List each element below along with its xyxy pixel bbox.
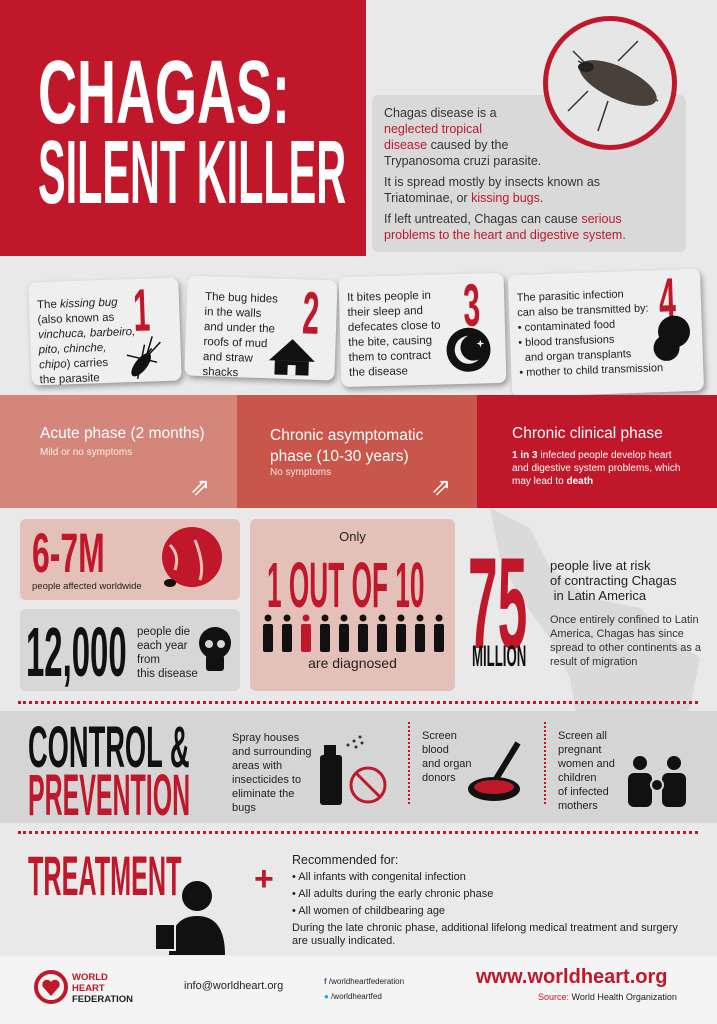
card 1: (also known as xyxy=(37,312,114,326)
card 2: in the walls xyxy=(204,306,262,320)
card 3: the bite, causing xyxy=(348,335,432,349)
logo: HEART xyxy=(72,983,105,994)
item: screen blood: Screen xyxy=(422,730,457,742)
intro text box: Chagas disease is a xyxy=(384,106,497,120)
source: Source: World Health Organization xyxy=(538,992,677,1002)
phase: chronic clinical: 1 in 3 infected people develop heart xyxy=(512,450,672,461)
item: spray: and surrounding xyxy=(232,746,312,758)
heading: control & prevention xyxy=(28,715,190,828)
logo: WORLD xyxy=(72,972,108,983)
phase: chronic clinical: may lead to death xyxy=(512,476,593,487)
icon: people row xyxy=(263,614,444,652)
icon: bug xyxy=(126,336,161,379)
card 1 xyxy=(28,277,182,386)
stat: 75 million: MILLION xyxy=(472,640,526,673)
intro text box: If left untreated, Chagas can cause serious xyxy=(384,212,622,226)
icon: doctor xyxy=(156,881,225,955)
card 4: and organ transplants xyxy=(525,348,631,364)
stat: 1 out of 10: Only xyxy=(339,529,366,544)
social: ● /worldheartfed xyxy=(324,992,382,1001)
text: risk: in Latin America xyxy=(554,588,646,603)
intro text box: Trypanosoma cruzi parasite. xyxy=(384,154,541,168)
item: screen pregnant: of infected xyxy=(558,786,609,798)
card 1: 1 xyxy=(132,276,151,344)
card 1: vinchuca, barbeiro, xyxy=(38,326,135,341)
stat: 12,000: people die xyxy=(137,626,190,638)
card 2: 2 xyxy=(301,279,320,347)
phase: chronic clinical xyxy=(477,395,717,508)
card 2: shacks xyxy=(202,366,238,379)
phase: acute: Mild or no symptoms xyxy=(40,447,132,458)
stat: 6-7M: 6-7M xyxy=(32,521,105,584)
intro text box: problems to the heart and digestive system. xyxy=(384,228,626,242)
item: spray: bugs xyxy=(232,802,256,814)
card 4: • mother to child transmission xyxy=(519,362,663,379)
stat: 12,000: 12,000 xyxy=(26,613,127,691)
stat: 75 million: 75 xyxy=(468,530,527,676)
card 4: • contaminated food xyxy=(518,319,615,334)
stat: 1 out of 10 xyxy=(250,519,455,691)
treatment text: During the late chronic phase, additional lifelong medical treatment and surgery are usually indicated. xyxy=(292,922,678,947)
card 3 xyxy=(339,273,506,387)
treatment text xyxy=(292,853,678,947)
treatment text: • All adults during the early chronic phase xyxy=(292,888,493,900)
treatment text: Recommended for: xyxy=(292,853,398,867)
card 1: pito, chinche, xyxy=(38,342,107,356)
item: screen pregnant: children xyxy=(558,772,597,784)
item: screen blood: blood xyxy=(422,744,449,756)
stat: 1 out of 10: are diagnosed xyxy=(308,655,397,671)
card 1: the parasite xyxy=(39,372,100,386)
item: spray: eliminate the xyxy=(232,788,294,800)
icon: parasite xyxy=(654,316,690,361)
text: risk: people live at risk xyxy=(550,558,650,573)
intro text box: neglected tropical xyxy=(384,122,482,136)
icon: globe xyxy=(162,527,222,587)
social xyxy=(324,977,404,1001)
item: screen pregnant: pregnant xyxy=(558,744,601,756)
card 2: roofs of mud xyxy=(203,336,268,350)
icon: spray can xyxy=(320,736,386,805)
arrow: ⇗ xyxy=(190,474,210,501)
item: spray: insecticides to xyxy=(232,774,301,786)
card 1: chipo) carries xyxy=(39,357,108,371)
card 3: 3 xyxy=(462,271,481,339)
card 3: It bites people in xyxy=(347,290,431,304)
stat: 12,000: this disease xyxy=(137,668,198,680)
heading: control & prevention: PREVENTION xyxy=(28,763,190,828)
icon: moon cloud xyxy=(446,328,490,372)
stat: 6-7M xyxy=(20,519,240,600)
card 4: can also be transmitted by: xyxy=(517,303,649,319)
card 2: and straw xyxy=(203,351,253,365)
intro text box: disease caused by the xyxy=(384,138,508,152)
title: SILENT KILLER xyxy=(38,123,346,223)
card 3: their sleep and xyxy=(347,305,423,319)
intro text box xyxy=(372,95,686,252)
card 4: 4 xyxy=(658,266,677,333)
treatment text: • All infants with congenital infection xyxy=(292,871,466,883)
card 4: • blood transfusions xyxy=(518,334,615,349)
text: risk: of contracting Chagas xyxy=(550,573,676,588)
logo xyxy=(34,970,133,1005)
card 2 xyxy=(184,275,338,381)
text: risk xyxy=(550,558,701,668)
item: screen blood: and organ xyxy=(422,758,472,770)
phase: chronic clinical: and digestive system problems, which xyxy=(512,463,680,474)
intro text box: Triatominae, or kissing bugs. xyxy=(384,191,543,205)
item: screen pregnant: mothers xyxy=(558,800,598,812)
stat: 6-7M: people affected worldwide xyxy=(32,581,142,592)
title: CHAGAS: xyxy=(38,43,290,143)
icon: hut xyxy=(269,339,315,376)
stat: 1 out of 10: 1 OUT OF 10 xyxy=(267,549,424,621)
item: screen blood xyxy=(422,730,472,784)
stat: 12,000: each year xyxy=(137,640,188,652)
item: screen pregnant xyxy=(558,730,615,812)
title panel xyxy=(0,0,366,256)
footer xyxy=(0,956,717,1024)
heading: control & prevention: CONTROL & xyxy=(28,715,190,780)
icon: skull xyxy=(199,627,231,671)
dotted dividers xyxy=(18,701,698,704)
card 1: The kissing bug xyxy=(37,297,118,311)
item: screen pregnant: Screen all xyxy=(558,730,607,742)
card 3: the disease xyxy=(349,365,408,379)
title xyxy=(38,43,346,223)
card 3: defecates close to xyxy=(348,320,441,334)
phase: chronic clinical: Chronic clinical phase xyxy=(512,425,663,442)
card 2: and under the xyxy=(204,321,275,335)
stat: 12,000 xyxy=(20,609,240,691)
icon: petri dish xyxy=(468,741,520,801)
heading: treatment: TREATMENT xyxy=(28,844,182,907)
item: spray xyxy=(232,732,312,814)
phase: chronic asymptomatic: phase (10-30 years) xyxy=(270,448,409,465)
control band xyxy=(0,711,717,823)
card 4 xyxy=(508,269,704,397)
map background xyxy=(490,508,700,711)
item: spray: areas with xyxy=(232,760,282,772)
phase: chronic asymptomatic: Chronic asymptomatic xyxy=(270,427,423,444)
icon: plus: + xyxy=(254,860,274,898)
email: info@worldheart.org xyxy=(184,980,283,992)
item: spray: Spray houses xyxy=(232,732,299,744)
text: risk: Once entirely confined to Latin America, Chagas has since spread to other continents as a result of migration xyxy=(550,614,701,668)
icon: family xyxy=(628,756,686,807)
item: screen pregnant: women and xyxy=(558,758,615,770)
intro text box: It is spread mostly by insects known as xyxy=(384,175,600,189)
card 4: The parasitic infection xyxy=(517,288,624,304)
card 2: The bug hides xyxy=(205,291,278,306)
phase: acute: Acute phase (2 months) xyxy=(40,425,205,442)
phase: acute xyxy=(0,395,237,508)
website: www.worldheart.org xyxy=(476,966,668,988)
phase: chronic asymptomatic: No symptoms xyxy=(270,467,331,478)
stat: 12,000: from xyxy=(137,654,160,666)
social: f /worldheartfederation xyxy=(324,977,404,986)
treatment text: • All women of childbearing age xyxy=(292,905,445,917)
card 3: them to contract xyxy=(349,350,431,364)
phase: chronic asymptomatic xyxy=(237,395,477,508)
logo: FEDERATION xyxy=(72,994,133,1005)
arrow: ⇗ xyxy=(431,474,451,501)
icon: bug photo xyxy=(543,16,677,150)
item: screen blood: donors xyxy=(422,772,456,784)
